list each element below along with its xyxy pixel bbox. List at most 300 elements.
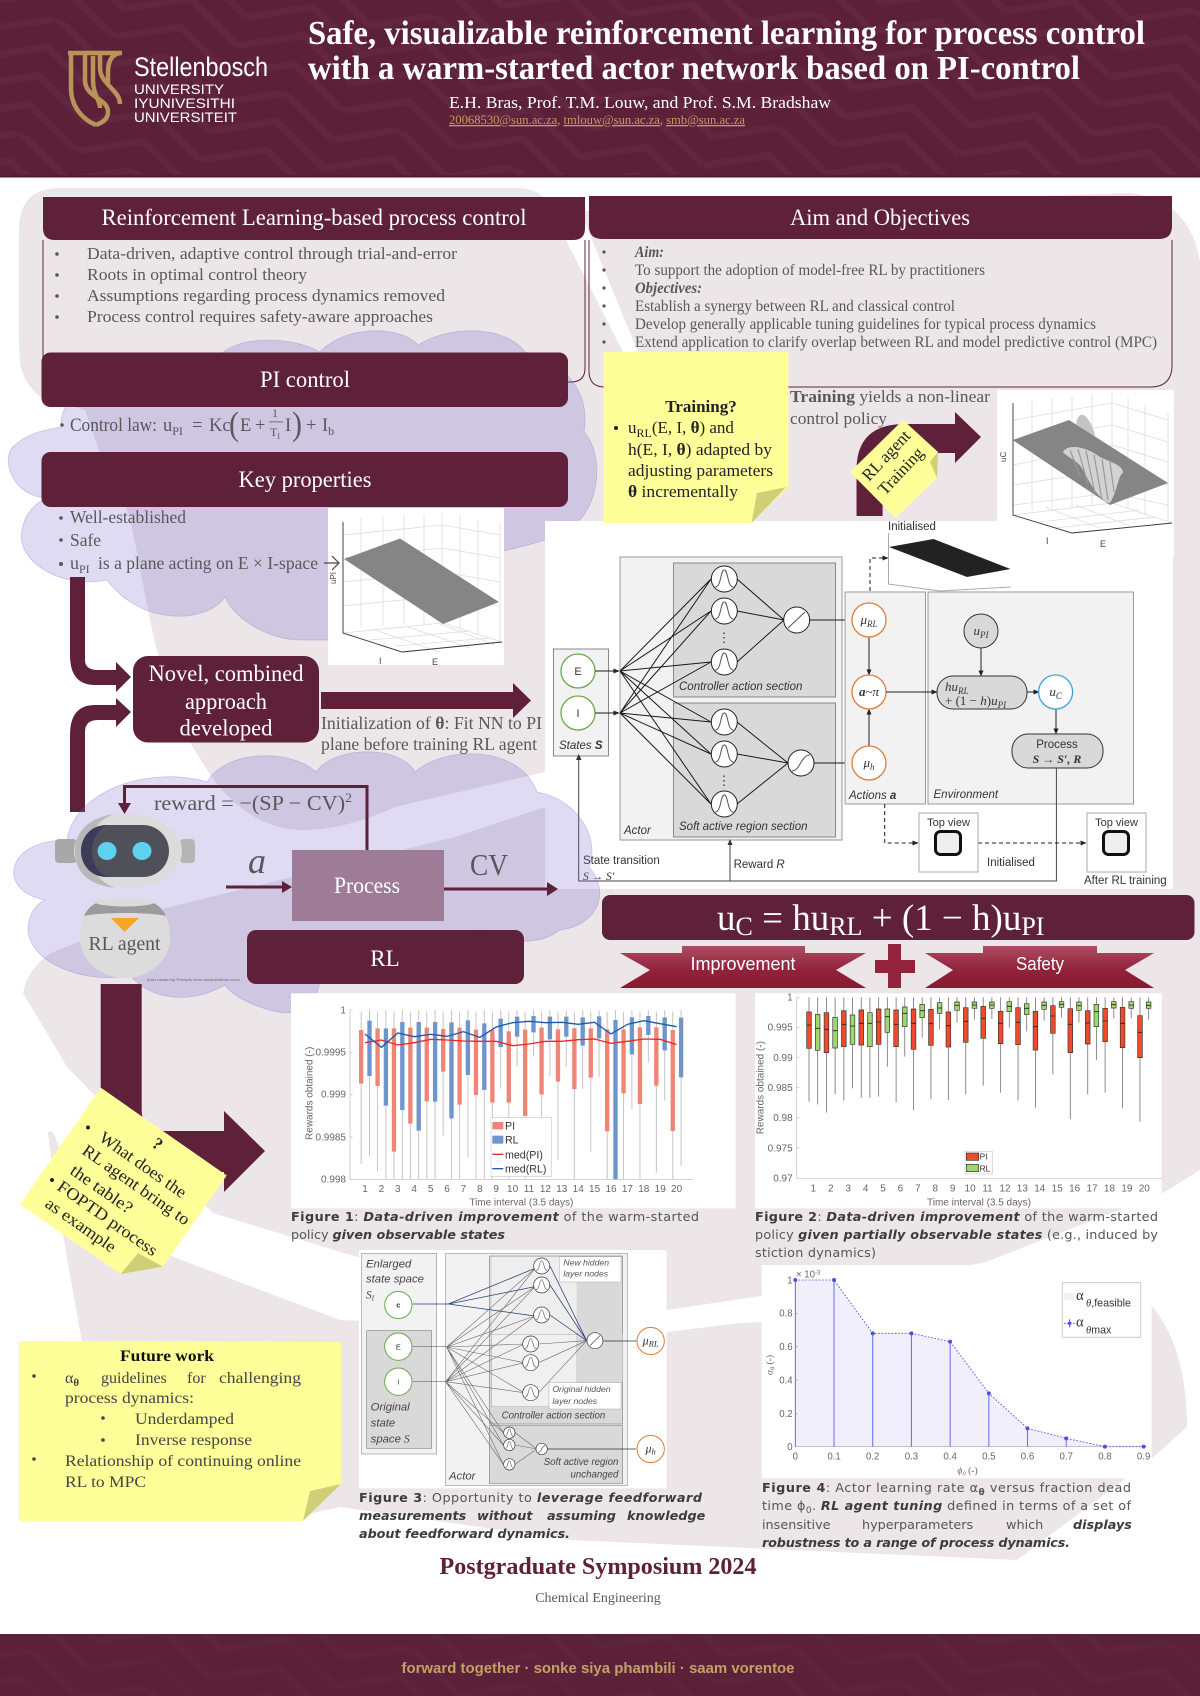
figure 4: actor learning rate chart: 0.6 — [779, 1342, 793, 1353]
figure 3 caption: about feedforward dynamics. — [359, 1527, 570, 1542]
figure background: actor network — [545, 521, 1173, 889]
figure 4 caption: θ — [979, 1488, 985, 1498]
enlarged state space box: state — [371, 1418, 395, 1430]
sticky note: what does the RL agent bring — [20, 1088, 227, 1274]
curved arrow: training — [856, 412, 981, 516]
figure 4 caption: time ϕ — [762, 1499, 805, 1514]
action a label and arrow — [226, 841, 292, 893]
figure 4 caption: robustness to a range of process dynamics. — [762, 1536, 1070, 1551]
figure 2 caption: policy given partially observable states (e.g., induced by — [755, 1228, 1158, 1243]
sticky note: training: θ) and — [691, 418, 734, 437]
enlarged state space box: Enlarged — [366, 1258, 412, 1270]
sticky note: training — [604, 352, 788, 523]
actor box: ⋮ — [718, 630, 730, 645]
actor box: Soft active region section — [679, 821, 808, 833]
figure 3: enlarged state space network: μ — [643, 1333, 649, 1347]
sticky note: RL agent training: Training — [874, 443, 928, 499]
figure 3 caption: assuming — [547, 1509, 616, 1524]
sticky note: what does the RL agent bring: ? — [149, 1134, 167, 1154]
environment box: Environment — [934, 789, 999, 801]
figure 2: box plot partially observable: 9 — [950, 1183, 956, 1194]
figure 1: box plot PI vs RL: 20 — [671, 1184, 683, 1195]
panel: reinforcement learning-based process control: Roots in optimal control theory — [87, 265, 308, 284]
figure 1: box plot PI vs RL: 18 — [638, 1184, 650, 1195]
figure 3: enlarged state space network: RL — [648, 1338, 659, 1348]
top view insets: After RL training — [1084, 875, 1167, 887]
authors and emails: 20068530@sun.ac.za, tmlouw@sun.ac.za, smb@sun.ac.za — [449, 112, 745, 127]
figure 4: actor learning rate chart: 1 — [787, 1275, 793, 1286]
combined control law formula bar: C — [736, 912, 753, 941]
figure 4: actor learning rate chart: 0.9 — [1137, 1451, 1150, 1462]
training policy panel — [790, 387, 1174, 557]
icon: robot RL agent: Icon made by Freepik from www.flaticon.com — [147, 977, 241, 982]
initialization text: Initialization of θ: Fit NN to PI — [321, 713, 542, 733]
hidden node labels: layer nodes — [563, 1269, 609, 1279]
symposium title: Postgraduate Symposium 2024 — [440, 1554, 756, 1580]
sticky note: future work: RL to MPC — [65, 1474, 146, 1491]
sticky note: what does the RL agent bring: What does the — [96, 1128, 190, 1202]
figure 2 caption — [755, 1210, 1158, 1261]
figure 4: actor learning rate chart: (-) — [765, 1355, 776, 1367]
figure 4: actor learning rate chart: 0.3 — [905, 1451, 918, 1462]
figure 1: box plot PI vs RL: 7 — [461, 1184, 467, 1195]
figure 2: box plot partially observable: 14 — [1034, 1183, 1046, 1194]
sticky note: RL agent training: RL agent — [858, 426, 914, 485]
enlarged state space box: I — [397, 1377, 399, 1386]
sticky note: future work: Relationship of continuing online — [65, 1453, 301, 1470]
figure 2: box plot partially observable: 3 — [845, 1183, 851, 1194]
panel: aim and objectives: Aim and Objectives — [790, 205, 970, 231]
legend: PI — [980, 1152, 988, 1162]
hidden node labels: unchanged — [571, 1470, 619, 1481]
sticky note: what does the RL agent bring: the table? — [67, 1161, 137, 1218]
section heading: key properties: Key properties — [238, 467, 372, 493]
chart: learned control surface: E — [1100, 539, 1106, 549]
sticky note: future work: guidelines — [101, 1370, 167, 1387]
arrow: novel approach to network — [321, 683, 531, 718]
top view insets: Top view — [927, 817, 970, 829]
key properties list: Well-established — [70, 507, 186, 527]
figure 1: box plot PI vs RL: 8 — [477, 1184, 483, 1195]
sticky note: training: u — [628, 418, 636, 437]
sticky note: training: θ incrementally — [628, 482, 739, 501]
figure 2: box plot partially observable: 4 — [863, 1183, 869, 1194]
reward loop line and formula: reward = −(SP − CV) — [154, 791, 335, 815]
panel: reinforcement learning-based process control: Process control requires safety-aware approaches — [87, 307, 433, 326]
legend: α — [1076, 1288, 1084, 1304]
panel: reinforcement learning-based process control: Assumptions regarding process dynamics removed — [87, 286, 446, 305]
figure 2: box plot partially observable: 7 — [915, 1183, 921, 1194]
feedback lines — [576, 754, 1056, 883]
section heading: RL — [247, 930, 524, 984]
figure 1: box plot PI vs RL: 19 — [655, 1184, 666, 1195]
panel: aim and objectives: To support the adoption of model-free RL by practitioners — [635, 262, 985, 279]
actions box — [845, 592, 926, 804]
big arrow: RL to results — [101, 984, 265, 1192]
control law text: PI — [172, 424, 183, 438]
figure 1: box plot PI vs RL: 9 — [493, 1184, 499, 1195]
control law text: ) — [292, 406, 302, 443]
figure 2: box plot partially observable: 0.99 — [773, 1053, 793, 1064]
figure 2: box plot partially observable: 0.97 — [773, 1174, 793, 1185]
sticky note: future work: α — [65, 1370, 73, 1387]
control law text: ( — [229, 406, 239, 443]
section heading: RL: RL — [370, 946, 400, 971]
section heading: key properties — [42, 452, 568, 507]
footer band: forward together · sonke siya phambili · saam vorentoe — [402, 1660, 794, 1677]
chart: PI plane surface: E — [432, 657, 438, 667]
top view insets: Top view — [1095, 817, 1138, 829]
figure 2: box plot partially observable: 5 — [880, 1183, 886, 1194]
figure 1: box plot PI vs RL: 5 — [428, 1184, 434, 1195]
environment box: u — [974, 623, 980, 638]
environment box: S → S′, R — [1033, 752, 1081, 766]
actions box: Actions a — [848, 790, 897, 802]
panel: aim and objectives: Extend application to clarify overlap between RL and model predictive control (MPC) — [635, 334, 1157, 351]
icon: robot RL agent — [55, 814, 241, 982]
figure 2 caption: stiction dynamics) — [755, 1246, 876, 1261]
environment box: PI — [997, 700, 1007, 710]
icon: plus — [875, 944, 915, 988]
figure 4: actor learning rate chart: 0.2 — [866, 1451, 879, 1462]
footer band — [0, 1634, 1200, 1696]
hidden node labels: New hidden — [563, 1257, 609, 1267]
section: network diagram — [554, 521, 1167, 887]
control law text: I — [285, 416, 291, 436]
key properties list: is a plane acting on E × I-space — [98, 553, 318, 573]
figure 1: box plot PI vs RL: 2 — [379, 1184, 385, 1195]
legend — [965, 1152, 993, 1174]
figure 4: actor learning rate chart: 0.1 — [827, 1451, 841, 1462]
control law text: b — [328, 424, 334, 438]
sticky note: what does the RL agent bring: as example — [42, 1194, 120, 1256]
logo: Stellenbosch University: UNIVERSITEIT — [134, 109, 237, 125]
box: novel combined approach: developed — [180, 716, 273, 742]
actor box: Controller action section — [679, 681, 802, 693]
title: Safe, visualizable reinforcement learning for process control — [308, 15, 1145, 52]
figure 1: box plot PI vs RL: 1 — [340, 1005, 346, 1016]
figure 4: actor learning rate chart: θ — [770, 1367, 776, 1370]
key properties list: u — [70, 553, 79, 573]
figure 4: actor learning rate chart: 0.8 — [779, 1309, 793, 1320]
sticky note: future work: Inverse response — [135, 1432, 252, 1449]
box: novel combined approach — [133, 656, 319, 742]
panel: reinforcement learning-based process control — [43, 197, 585, 382]
control law text: Control law: — [70, 416, 157, 436]
figure 2: box plot partially observable: 19 — [1121, 1183, 1133, 1194]
feedback lines: S → S′ — [583, 871, 615, 883]
figure 4: actor learning rate chart: 0.4 — [779, 1375, 793, 1386]
legend — [1062, 1283, 1141, 1337]
figure 2: box plot partially observable: 2 — [828, 1183, 834, 1194]
figure 1: box plot PI vs RL: 3 — [395, 1184, 401, 1195]
figure 2: box plot partially observable: 11 — [982, 1183, 993, 1194]
key properties list: Safe — [70, 530, 101, 550]
legend: med(RL) — [505, 1164, 546, 1176]
header band — [0, 0, 1200, 178]
figure 4: actor learning rate chart: × 10 — [796, 1269, 815, 1280]
environment box: C — [1056, 691, 1063, 701]
figure 2: box plot partially observable: 1 — [811, 1183, 817, 1194]
figure 4: actor learning rate chart: 0 — [787, 1442, 793, 1453]
figure 1: box plot PI vs RL: Rewards obtained (-) — [304, 1047, 315, 1140]
chart: PI plane surface: I — [379, 656, 382, 666]
initialised plane inset — [888, 521, 1011, 591]
figure 4 caption: which — [1006, 1518, 1043, 1533]
chart: learned control surface: uC — [999, 452, 1008, 462]
states box — [554, 649, 608, 756]
figure 4: actor learning rate chart: 0.7 — [1060, 1451, 1073, 1462]
hidden node labels: Actor — [448, 1471, 477, 1483]
department: Chemical Engineering — [535, 1591, 661, 1606]
figure 2: box plot partially observable: 20 — [1139, 1183, 1150, 1194]
sticky note: future work: process dynamics: — [65, 1390, 194, 1407]
box: novel combined approach: Novel, combined — [148, 661, 304, 687]
icon: robot RL agent: RL agent — [88, 933, 161, 955]
key properties list — [59, 507, 318, 576]
box: novel combined approach: approach — [185, 689, 267, 715]
environment box: Process — [1036, 739, 1078, 751]
chart: PI plane surface: uPI — [329, 572, 338, 584]
figure 1: box plot PI vs RL: 14 — [573, 1184, 584, 1195]
figure 4: actor learning rate chart: 0.4 — [943, 1451, 957, 1462]
figure 1: box plot PI vs RL: 11 — [524, 1184, 535, 1195]
sticky note: training: Training? — [665, 397, 737, 416]
actor box: Actor — [623, 825, 652, 837]
combined control law formula bar — [602, 895, 1194, 941]
figure 1: box plot PI vs RL: 12 — [540, 1184, 551, 1195]
figure 2: box plot partially observable: 0.995 — [768, 1023, 793, 1034]
sticky note: future work: for — [187, 1370, 206, 1387]
sticky note: future work: θ — [73, 1377, 79, 1389]
figure 1: box plot PI vs RL: 0.9995 — [315, 1048, 346, 1059]
figure 1: box plot PI vs RL: 16 — [605, 1184, 617, 1195]
environment box: hu — [945, 679, 958, 694]
chart: learned control surface: I — [1046, 536, 1049, 546]
figure 2: box plot partially observable: 6 — [898, 1183, 904, 1194]
section heading: PI control — [42, 352, 568, 407]
banner: safety: Safety — [1016, 954, 1064, 974]
logo: Stellenbosch University — [68, 52, 268, 125]
enlarged state space box: space S — [371, 1433, 410, 1445]
figure 1 caption: Figure 1: Data-driven improvement of the warm-started — [291, 1210, 699, 1225]
legend: RL — [980, 1163, 991, 1173]
box: process: Process — [334, 873, 400, 898]
enlarged state space box: E — [396, 1342, 401, 1351]
figure 3 caption: Figure 3: Opportunity to leverage feedforward — [359, 1491, 703, 1506]
figure 1: box plot PI vs RL: 1 — [362, 1184, 368, 1195]
figure 3 caption: without — [477, 1509, 533, 1524]
figure 3 caption: knowledge — [627, 1509, 706, 1524]
figure 3: enlarged state space network — [359, 1250, 667, 1488]
figure 4: actor learning rate chart: 0.8 — [1098, 1451, 1112, 1462]
control law text: I — [277, 432, 280, 441]
panel: aim and objectives: Aim: — [634, 244, 664, 261]
enlarged state space box: Original — [371, 1402, 410, 1414]
top view insets: Initialised — [987, 857, 1035, 869]
sticky note: training: h(E, I, θ) adapted by — [628, 440, 773, 459]
sticky note: future work: Future work — [120, 1348, 214, 1365]
enlarged state space box: I — [371, 1293, 375, 1302]
figure 4 caption: Figure 4: Actor learning rate α — [762, 1481, 978, 1496]
figure 2: box plot partially observable: 18 — [1104, 1183, 1115, 1194]
hidden node labels — [448, 1257, 621, 1483]
environment box: RL — [957, 686, 969, 696]
figure 2: box plot partially observable: 8 — [932, 1183, 938, 1194]
panel: aim and objectives: Objectives: — [635, 280, 702, 297]
training yields text: Training yields a non-linear — [790, 387, 990, 406]
actor box — [595, 557, 852, 840]
legend: med(PI) — [505, 1149, 543, 1161]
cloud: RL — [14, 752, 600, 1013]
enlarged state space box: state space — [366, 1274, 424, 1286]
figure 4 caption: insensitive — [762, 1518, 831, 1533]
panel: aim and objectives: Develop generally applicable tuning guidelines for typical process dynamics — [635, 316, 1096, 333]
actor box: ⋮ — [718, 773, 730, 788]
figure 1: box plot PI vs RL: 13 — [556, 1184, 568, 1195]
reward loop line and formula — [118, 786, 367, 851]
environment box: u — [1049, 684, 1056, 699]
figure 4 caption: . — [812, 1499, 821, 1514]
panel: aim and objectives — [589, 196, 1172, 387]
figure 4 caption: 0 — [806, 1506, 812, 1516]
control law text: + — [255, 416, 265, 436]
sticky note: RL agent training — [850, 420, 938, 518]
figure 4 caption: hyperparameters — [862, 1518, 973, 1533]
sticky note: future work: challenging — [219, 1370, 301, 1387]
actions box: RL — [866, 619, 878, 629]
hidden node labels: Original hidden — [552, 1384, 611, 1394]
initialization text — [321, 713, 542, 754]
figure 1 caption: policy given observable states — [291, 1228, 505, 1243]
hidden node labels: layer nodes — [552, 1396, 598, 1406]
actions box: a~π — [859, 684, 880, 699]
actor box — [446, 1253, 627, 1486]
sticky note: training: adjusting parameters — [628, 461, 773, 480]
sticky note: training: RL — [636, 426, 652, 440]
environment box: + (1 − h)u — [945, 693, 998, 708]
figure 3 caption — [359, 1491, 706, 1542]
figure 2: box plot partially observable — [755, 993, 1162, 1208]
legend: θmax — [1086, 1324, 1112, 1336]
key properties list: PI — [79, 562, 90, 576]
arrow: from key properties to novel approach — [70, 577, 131, 692]
figure 2: box plot partially observable: 1 — [787, 993, 793, 1004]
figure 4: actor learning rate chart: 0 — [962, 1470, 966, 1477]
figure 4: actor learning rate chart: ϕ — [957, 1465, 962, 1476]
figure 3: enlarged state space network: μ — [645, 1441, 652, 1455]
environment box — [886, 592, 1134, 804]
control law text — [60, 406, 334, 443]
chart: learned control surface — [997, 390, 1174, 557]
figure 1: box plot PI vs RL: 6 — [444, 1184, 450, 1195]
figure 2: box plot partially observable: Time interval (3.5 days) — [927, 1197, 1031, 1208]
figure 4: actor learning rate chart: α — [765, 1370, 776, 1375]
figure 1: box plot PI vs RL: 0.998 — [321, 1175, 346, 1186]
actions box: μ — [860, 612, 867, 627]
title — [308, 15, 1145, 87]
action a label and arrow: a — [248, 841, 266, 881]
panel: reinforcement learning-based process control: Data-driven, adaptive control through trial-and-error — [87, 244, 457, 263]
actions box: h — [870, 762, 875, 772]
authors and emails: E.H. Bras, Prof. T.M. Louw, and Prof. S.M. Bradshaw — [449, 93, 832, 112]
figure 1: box plot PI vs RL: 4 — [411, 1184, 417, 1195]
figure 1: box plot PI vs RL: Time interval (3.5 days) — [469, 1197, 573, 1208]
hidden node labels: Controller action section — [502, 1410, 605, 1421]
arrow: from RL to novel approach — [70, 698, 131, 812]
combined control law formula bar: RL — [829, 912, 862, 941]
figure 2: box plot partially observable: 0.985 — [768, 1083, 793, 1094]
CV label and arrow: CV — [470, 847, 509, 882]
figure 4: actor learning rate chart: (-) — [966, 1465, 978, 1476]
combined control law formula bar: = hu — [753, 898, 829, 939]
figure 2: box plot partially observable: 10 — [965, 1183, 976, 1194]
enlarged state space box: S — [366, 1289, 372, 1301]
control law text: Kc — [209, 416, 231, 436]
figure 2: box plot partially observable: 0.98 — [773, 1113, 793, 1124]
panel: reinforcement learning-based process control: Reinforcement Learning-based process control — [102, 205, 527, 231]
initialization text: plane before training RL agent — [321, 734, 537, 754]
sticky note: training: (E, I, — [652, 418, 691, 437]
figure 3 caption: measurements — [359, 1509, 467, 1524]
page background shapes — [19, 184, 1200, 1560]
states box: States S — [559, 740, 603, 752]
figure 2: box plot partially observable: 17 — [1087, 1183, 1098, 1194]
figure 4 caption: versus fraction dead — [985, 1481, 1131, 1496]
hidden node labels: Soft active region — [544, 1457, 618, 1468]
enlarged state space box — [362, 1253, 437, 1454]
authors and emails — [449, 93, 832, 127]
logo: Stellenbosch University: UNIVERSITY — [134, 81, 225, 97]
figure 1: box plot PI vs RL: 15 — [589, 1184, 601, 1195]
legend: RL — [505, 1135, 519, 1147]
figure 1: box plot PI vs RL: 10 — [507, 1184, 519, 1195]
training yields text: control policy — [790, 409, 887, 428]
combined control law formula bar: + (1 − h)u — [862, 898, 1021, 939]
figure 2: box plot partially observable: 12 — [999, 1183, 1011, 1194]
figure 2: box plot partially observable: Rewards obtained (-) — [756, 1041, 767, 1134]
initialised plane inset: Initialised — [888, 521, 936, 533]
figure 2 caption: Figure 2: Data-driven improvement of the warm-started — [755, 1210, 1158, 1225]
title: with a warm-started actor network based on PI-control — [308, 50, 1080, 87]
figure 4 caption: RL agent tuning defined in terms of a set of — [821, 1499, 1131, 1514]
banner: safety — [925, 946, 1154, 988]
feedback lines: Reward R — [734, 859, 785, 871]
figure 4: actor learning rate chart: -3 — [815, 1271, 821, 1277]
section heading: PI control: PI control — [260, 367, 350, 393]
control law text: E — [240, 416, 251, 436]
figure 3: enlarged state space network: h — [652, 1446, 656, 1456]
reward loop line and formula: 2 — [345, 790, 352, 805]
control law text: + — [306, 416, 316, 436]
figure 1 caption — [291, 1210, 699, 1243]
sticky note: future work — [19, 1341, 341, 1521]
panel: aim and objectives: Establish a synergy between RL and classical control — [635, 298, 955, 315]
environment box: PI — [979, 630, 989, 640]
combined control law formula bar: u — [717, 898, 736, 939]
feedback lines: State transition — [583, 855, 660, 867]
actions box: μ — [863, 755, 870, 770]
figure 4: actor learning rate chart: 0.6 — [1021, 1451, 1034, 1462]
figure 4: actor learning rate chart — [762, 1265, 1152, 1478]
combined control law formula bar: PI — [1021, 912, 1044, 941]
chart: PI plane surface — [328, 508, 504, 667]
logo: Stellenbosch University: Stellenbosch — [134, 52, 268, 82]
figure 1: box plot PI vs RL — [291, 993, 736, 1208]
banner: improvement: Improvement — [690, 954, 796, 974]
states box: I — [576, 708, 580, 720]
states box: E — [574, 666, 582, 678]
